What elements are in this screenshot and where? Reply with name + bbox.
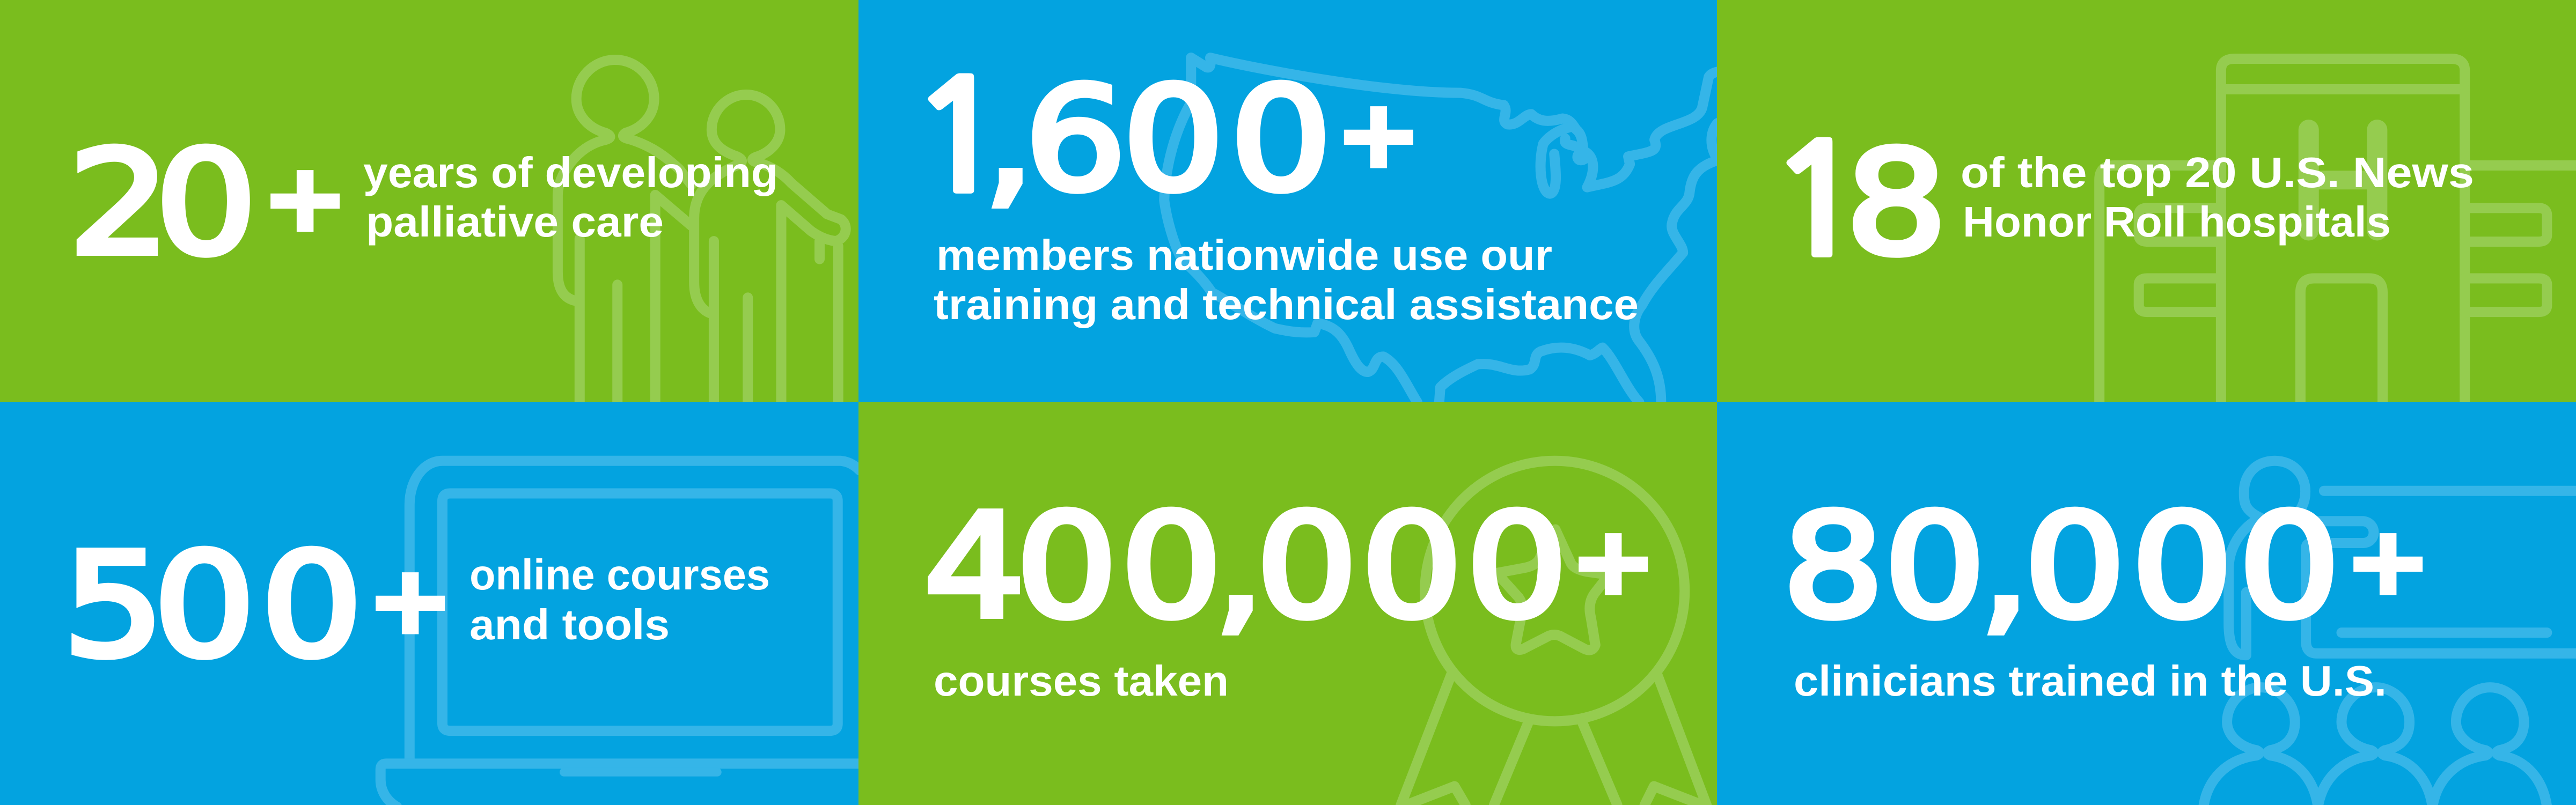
panel: 18 hospitals (1717, 0, 2576, 402)
big number: 18: 1 (1765, 125, 1871, 279)
caption line 1: of the top 20 U.S. News (1961, 149, 2474, 196)
panel background (0, 0, 858, 402)
panel background (1717, 0, 2576, 402)
caption line 1: members nationwide use our (936, 231, 1552, 279)
caption line 1: online courses (469, 551, 770, 599)
panel background (1717, 402, 2576, 805)
caption: clinicians trained in the U.S. (1794, 657, 2387, 705)
panel: 20+ years (0, 0, 858, 402)
big number: 400,000+: 400,000 (923, 483, 1568, 649)
caption line 2: training and technical assistance (934, 280, 1639, 328)
panel background (858, 402, 1717, 805)
icon: map of the United States (1159, 53, 1717, 402)
big number: 500+: + (370, 551, 451, 651)
big number: 80,000+: 80,000 (1782, 483, 2340, 649)
panel: 500+ online courses (0, 402, 860, 805)
big number: 1,600+: ,600 (984, 56, 1332, 223)
big number: 20+: 20 (69, 120, 257, 286)
big number: 400,000+: + (1573, 512, 1654, 612)
big number: 20+: + (265, 149, 346, 249)
icon: award ribbon (1396, 456, 1712, 805)
big number: 1,600+: 1 (907, 61, 1012, 215)
panel: 1,600+ members (858, 0, 1718, 402)
caption line 2: and tools (469, 601, 670, 648)
big number: 1,600+: + (1338, 85, 1419, 185)
panel background (0, 402, 858, 805)
panel: 80,000+ clinicians (1717, 402, 2576, 805)
caption line 1: years of developing (363, 149, 778, 196)
caption line 2: Honor Roll hospitals (1963, 198, 2391, 246)
big number: 18: 8 (1846, 120, 1947, 286)
panel background (858, 0, 1717, 402)
caption: courses taken (934, 657, 1229, 705)
icon: hospital building (2094, 54, 2576, 402)
icon: presenter at board and audience (2199, 456, 2576, 805)
icon: laptop (376, 456, 858, 805)
icon: two people with cane (553, 55, 851, 402)
panel: 400,000+ courses (858, 402, 1717, 805)
big number: 80,000+: + (2348, 512, 2428, 612)
big number: 500+: 500 (63, 522, 363, 689)
caption line 2: palliative care (366, 198, 664, 246)
